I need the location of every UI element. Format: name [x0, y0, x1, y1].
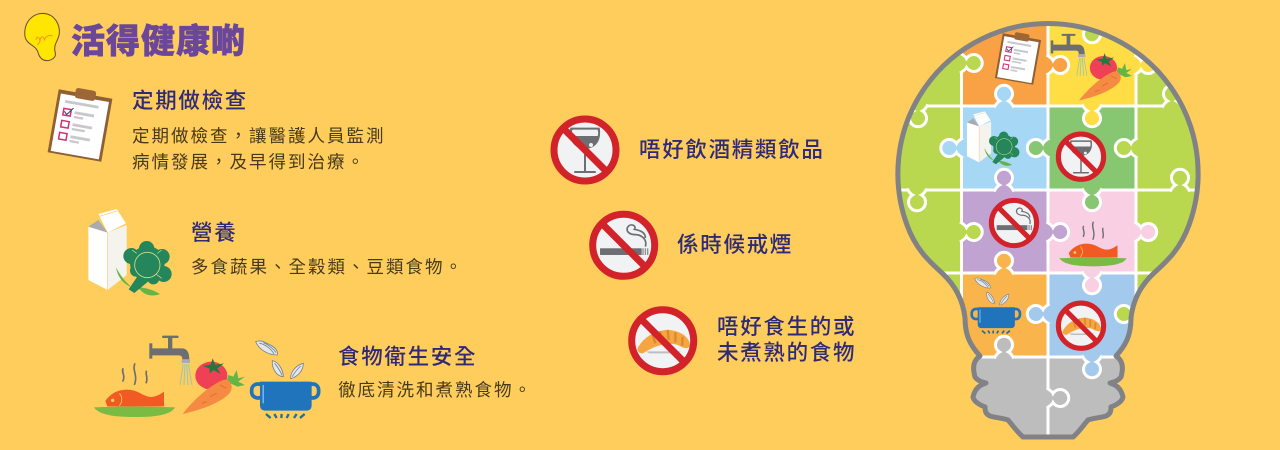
icon: pot with clams — [252, 341, 319, 418]
icon: clipboard — [48, 85, 113, 162]
text: check-ups description: 病情發展，及早得到治療。 — [132, 152, 366, 172]
item: no alcohol — [554, 119, 825, 181]
icon: no smoking — [593, 214, 655, 276]
icon: no sushi — [632, 310, 694, 372]
bulb icon: no sushi — [1058, 303, 1104, 348]
heading: nutrition: 營養 — [191, 221, 237, 245]
bulb outline — [898, 23, 1198, 437]
icon: tomato and carrot — [183, 358, 245, 414]
icon: cooked fish — [94, 363, 175, 417]
section: food hygiene — [94, 336, 533, 418]
icon: yellow light bulb — [25, 13, 59, 61]
item: no raw food — [632, 310, 856, 372]
text: no raw food: 未煮熟的食物 — [717, 341, 856, 365]
heading: check-ups: 定期做檢查 — [132, 89, 248, 113]
bulb icon: tomato and carrot — [1079, 53, 1132, 100]
icon: no wine — [554, 119, 616, 181]
icon: milk carton and broccoli — [88, 209, 172, 295]
bulb icon: clipboard — [995, 30, 1042, 85]
bulb icon: milk and broccoli — [967, 111, 1019, 166]
text: no raw food: 唔好食生的或 — [717, 315, 856, 339]
section: regular check-ups — [48, 85, 386, 172]
bulb icon: pot — [972, 278, 1020, 333]
section: nutrition — [88, 209, 464, 295]
puzzle light bulb — [895, 21, 1201, 440]
heading: food hygiene: 食物衛生安全 — [338, 345, 477, 369]
bulb icon: tap — [1051, 34, 1087, 76]
text: check-ups description: 定期做檢查，讓醫護人員監測 — [132, 126, 386, 146]
text: no alcohol: 唔好飲酒精類飲品 — [639, 138, 825, 162]
icon: tap — [149, 336, 192, 385]
bulb icon: no wine — [1058, 134, 1104, 179]
item: quit smoking — [593, 214, 793, 276]
puzzle pieces — [900, 26, 1196, 434]
bulb icon: fish — [1059, 222, 1127, 266]
bulb icon: no smoking — [991, 200, 1037, 246]
text: nutrition description: 多食蔬果、全穀類、豆類食物。 — [191, 257, 464, 277]
text: quit smoking: 係時候戒煙 — [677, 233, 793, 257]
text: food hygiene description: 徹底清洗和煮熟食物。 — [338, 380, 533, 400]
title: 活得健康啲 — [71, 23, 246, 61]
